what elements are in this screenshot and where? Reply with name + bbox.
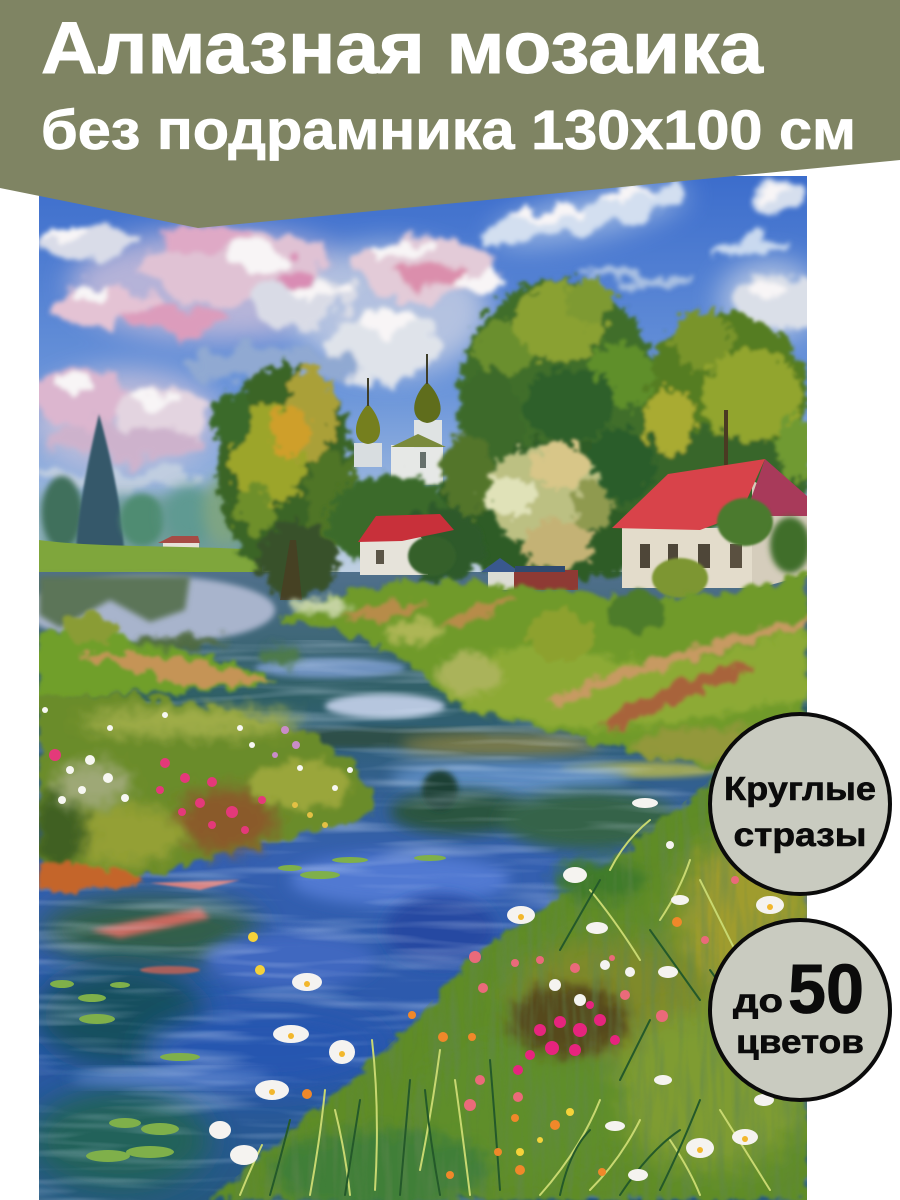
badge: round rhinestones: Круглые: [724, 770, 876, 807]
banner: [0, 0, 900, 228]
badge: up to 50 colours: цветов: [736, 1023, 864, 1060]
right meadow bank: [280, 570, 810, 770]
far treeline: [39, 414, 244, 549]
sky: [39, 176, 807, 576]
church: [354, 354, 446, 485]
meadow flowers: [209, 798, 784, 1181]
badge: up to 50 colours: до: [733, 982, 783, 1019]
blue shed: [481, 558, 578, 590]
subtitle: без подрамника 130х100 см: [41, 98, 856, 161]
grass blades: [240, 820, 770, 1195]
central tree: [212, 365, 358, 598]
water body: [39, 572, 807, 1200]
pale blossom tree: [484, 443, 610, 571]
clouds: [35, 177, 819, 490]
small red roof house: [358, 514, 456, 576]
tree trunk behind large house: [724, 410, 728, 465]
left bank blooms: [42, 707, 353, 834]
right trees: [430, 280, 813, 580]
cloud haze: [30, 171, 820, 470]
painting: river landscape: [25, 171, 820, 1200]
far bank: [39, 540, 262, 580]
badge: up to 50 colours: 50: [788, 950, 864, 1028]
meadow grass texture: [234, 784, 802, 1200]
river reflections: [25, 576, 807, 1200]
large red roof house: [612, 459, 810, 598]
badge: round rhinestones: [710, 714, 890, 894]
badge: up to 50 colours: [710, 920, 890, 1100]
badge: round rhinestones: стразы: [734, 816, 866, 853]
left bank: [39, 613, 300, 700]
left flower bank: [34, 694, 373, 890]
lily pads: [50, 855, 446, 1162]
lower right meadow: [205, 772, 815, 1200]
trees beside the church: [328, 475, 485, 583]
far house: [158, 536, 200, 553]
tree trunk: [280, 540, 302, 600]
title: Алмазная мозаика: [41, 8, 765, 89]
